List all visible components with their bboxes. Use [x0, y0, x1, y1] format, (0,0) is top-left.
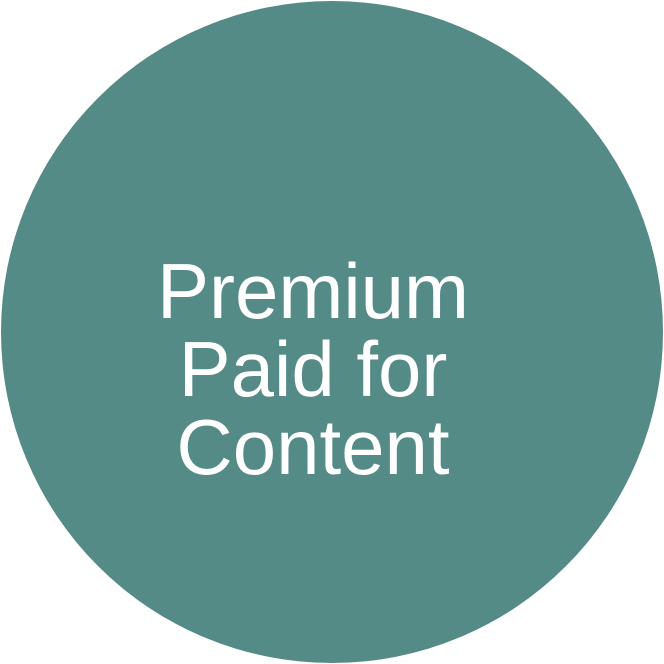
- text block: label: Content: [176, 403, 450, 491]
- text block: label: [157, 247, 469, 491]
- text block: label: Premium: [157, 247, 469, 335]
- text block: label: Paid for: [179, 325, 447, 413]
